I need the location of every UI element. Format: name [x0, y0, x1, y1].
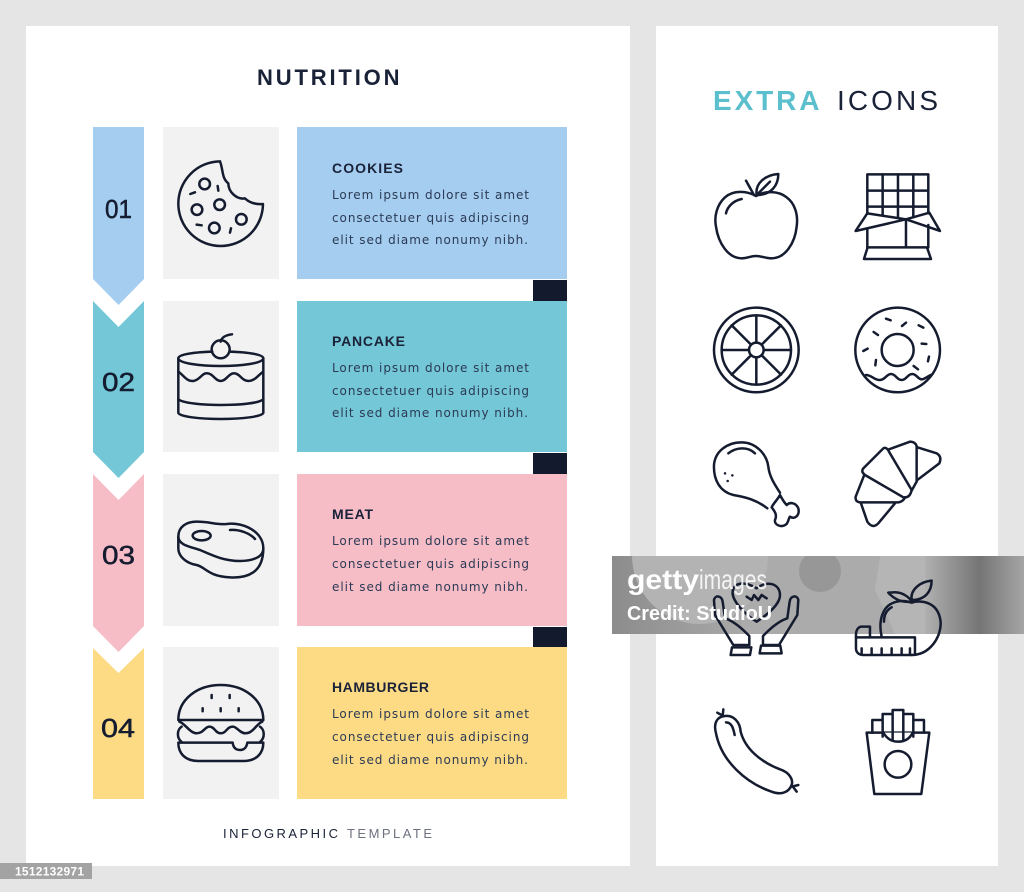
heading: extra icons: ICONS [837, 85, 938, 116]
watermark logo text [627, 564, 772, 625]
text card: pancake: PANCAKE [332, 333, 405, 349]
text card: cookies: COOKIES [332, 160, 403, 176]
heading: extra icons: EXTRA [713, 85, 820, 116]
text card: meat: consectetuer quis adipiscing [332, 557, 529, 571]
watermark logo text: getty [627, 564, 699, 595]
text card: hamburger: consectetuer quis adipiscing [332, 730, 529, 744]
step 3 row: meat [93, 474, 567, 652]
heading: extra icons [713, 85, 938, 116]
icon: chicken leg [714, 442, 799, 526]
text card: meat: elit sed diame nonumy nibh. [332, 580, 528, 594]
text card: meat [297, 474, 567, 626]
footer caption [223, 826, 432, 841]
icon: chocolate bar [856, 174, 940, 259]
text card: pancake: elit sed diame nonumy nibh. [332, 406, 528, 420]
footer caption: INFOGRAPHIC [223, 826, 338, 841]
icon panel: burger [163, 647, 279, 799]
text card: hamburger: elit sed diame nonumy nibh. [332, 753, 528, 767]
icon: french fries [867, 710, 929, 794]
arrow: step 02 [93, 301, 144, 478]
step 4 row: hamburger [93, 647, 567, 799]
arrow: step 03: 03 [102, 540, 135, 570]
arrow: step 03 [93, 474, 144, 652]
icon: sausage [715, 709, 798, 793]
step 2 row: pancake [93, 301, 567, 478]
arrow: step 02: 02 [102, 367, 135, 397]
arrow: step 04 [93, 648, 144, 799]
connector square 2 [533, 453, 567, 474]
arrow: step 01: 01 [105, 194, 132, 224]
icon panel: cookie [163, 127, 279, 279]
icon: apple with measuring tape [856, 581, 941, 655]
watermark logo text: Credit: StudioU [627, 603, 772, 625]
icon: apple [715, 174, 797, 258]
text card: pancake [297, 301, 567, 452]
arrow: step 04: 04 [101, 713, 135, 743]
icon: orange slice [714, 308, 799, 392]
text card: hamburger: HAMBURGER [332, 679, 429, 695]
stock id tag [0, 863, 92, 879]
watermark band [612, 556, 1024, 656]
title: NUTRITION [257, 65, 400, 90]
footer caption: TEMPLATE [347, 826, 432, 841]
panel: nutrition infographic [26, 26, 630, 866]
text card: cookies [297, 127, 567, 279]
icon panel: steak [163, 474, 279, 626]
connector square 1 [533, 280, 567, 301]
stock id tag: 1512132971 [15, 864, 84, 878]
watermark logo text: images [699, 564, 767, 595]
connector square 3 [533, 627, 567, 647]
arrow: step 01 [93, 127, 144, 305]
text card: meat: MEAT [332, 506, 373, 522]
text card: hamburger: Lorem ipsum dolore sit amet [332, 707, 529, 721]
icon: donut [855, 308, 940, 392]
icon panel: cake [163, 301, 279, 452]
step 1 row: cookies [93, 127, 567, 305]
text card: cookies: Lorem ipsum dolore sit amet [332, 188, 529, 202]
icon: croissant [856, 442, 940, 526]
text card: pancake: Lorem ipsum dolore sit amet [332, 361, 529, 375]
icon: hands holding heart [714, 584, 798, 655]
text card: hamburger [297, 647, 567, 799]
text card: pancake: consectetuer quis adipiscing [332, 384, 529, 398]
text card: cookies: elit sed diame nonumy nibh. [332, 233, 528, 247]
text card: cookies: consectetuer quis adipiscing [332, 211, 529, 225]
panel: extra icons [656, 26, 998, 866]
text card: meat: Lorem ipsum dolore sit amet [332, 534, 529, 548]
